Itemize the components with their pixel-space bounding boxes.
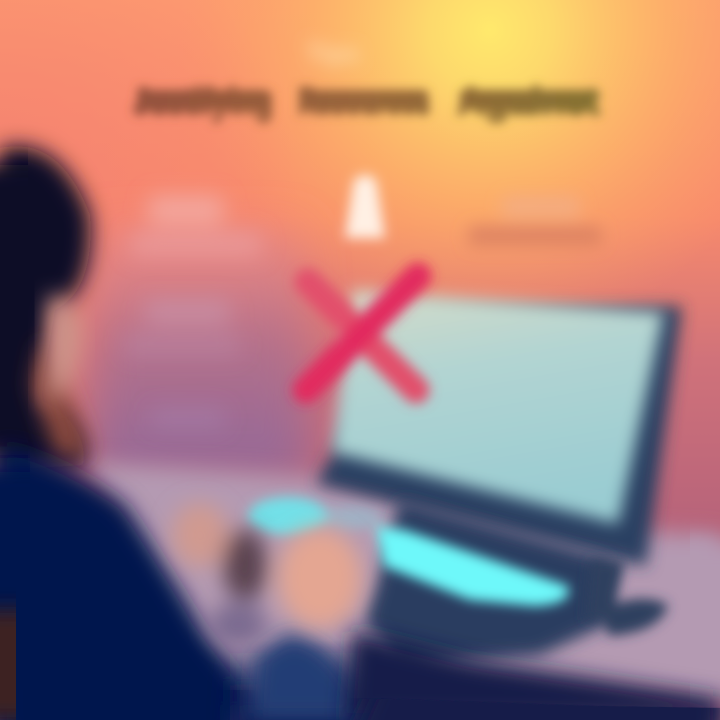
icon: white bell [345,175,385,238]
person hands [172,503,362,647]
person face [48,295,81,400]
laptop lid [316,306,682,566]
red cross [306,276,418,390]
person hair [0,146,91,470]
purple background panel [90,230,310,480]
title: Resources [298,81,430,123]
chair [0,610,16,720]
desk [85,462,720,720]
left text block [130,196,262,256]
small heading above title: Tips [307,38,359,68]
title [133,81,600,123]
title: Justifying [133,81,273,123]
dark table front [345,630,720,720]
keyboard glow [248,497,569,606]
person sweater [0,445,380,720]
computer mouse [585,560,668,636]
right text block [468,196,602,246]
left column text lines [125,300,240,428]
title: Against [457,81,600,123]
laptop screen [332,290,664,524]
laptop base [365,500,612,665]
